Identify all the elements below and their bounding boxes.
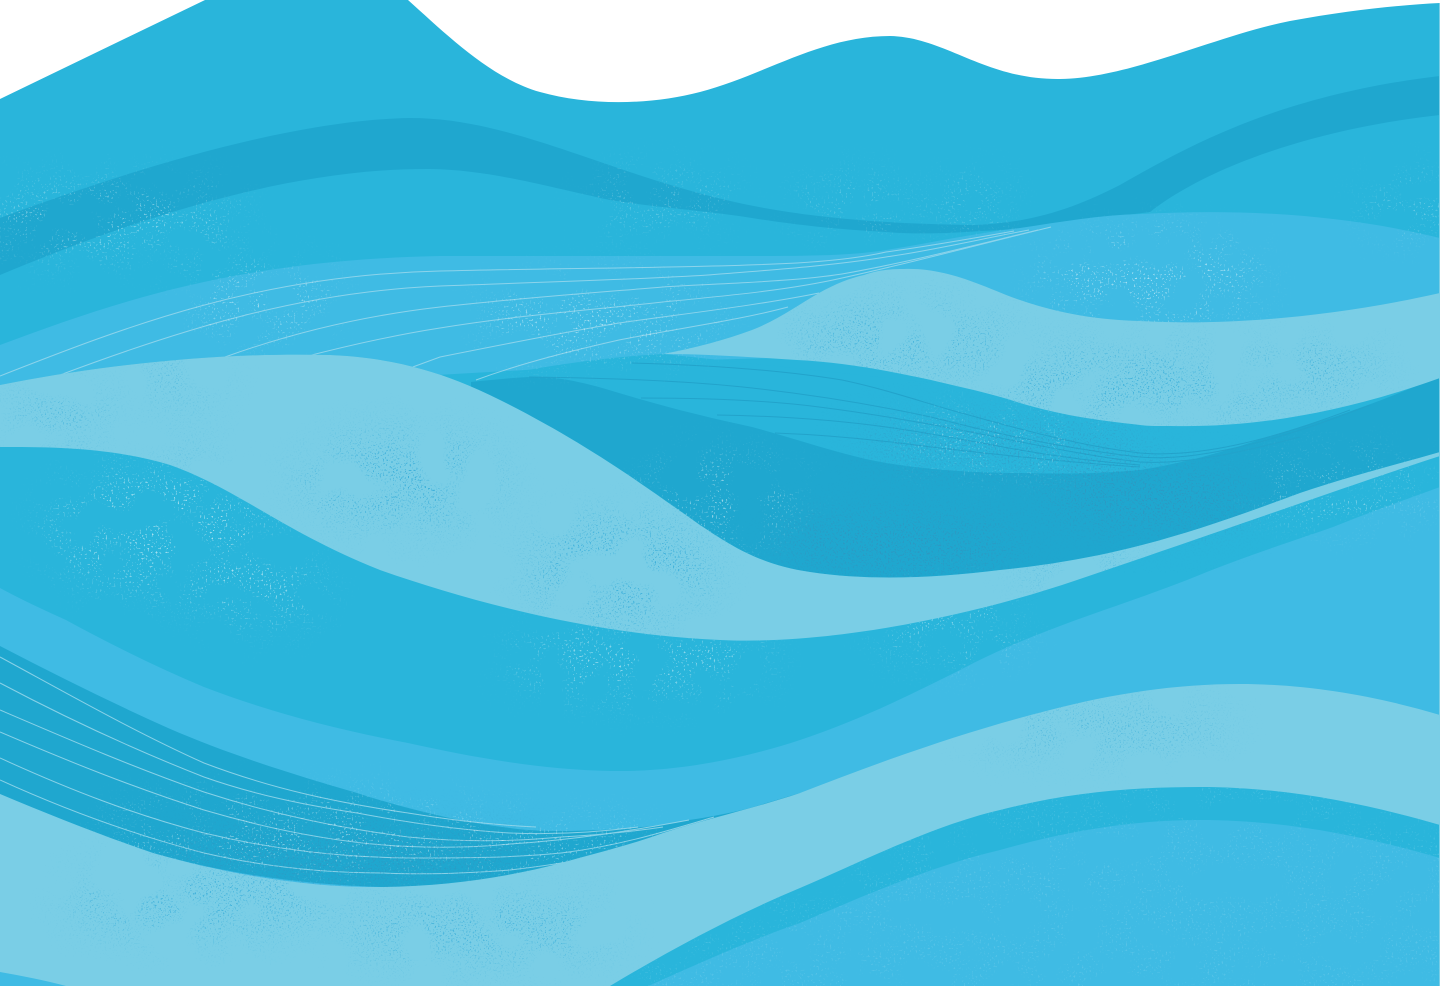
wave: lower pale band [0,684,1440,986]
wave: lower left dark band [0,646,800,900]
wave: upper light band [0,212,1440,400]
lines: lower left fine lines [0,657,730,874]
wave: upper dark band [0,76,1440,275]
wave: left pale hill [0,355,1440,641]
lines: upper light band fine lines [0,227,1051,380]
wave: bottom right base [610,787,1440,986]
wave: middle base wedge [471,354,1440,560]
wave: lower base [0,355,1440,986]
edge: right pale sliver [1439,3,1440,986]
texture: blue speckle on pale waves [6,291,1389,979]
wave: middle dark wave [471,376,1440,600]
texture: dark speckle [164,414,1240,887]
wave: lower light band [0,487,1440,986]
wave: bottom right light [648,820,1440,986]
lines: middle wedge fine lines [529,363,1370,467]
wave: upper right pale hill [663,269,1440,426]
